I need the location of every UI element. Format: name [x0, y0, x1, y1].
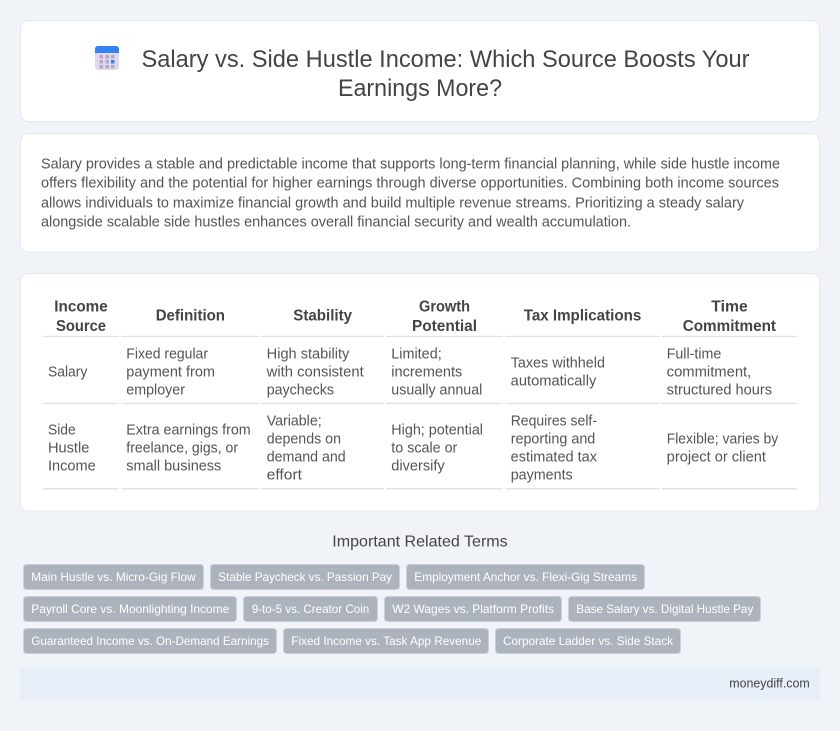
table header: Tax Implications [524, 308, 641, 325]
table row: side hustle income: Side [48, 422, 76, 438]
table row: salary: High stability [267, 346, 350, 362]
tag [406, 564, 644, 590]
panel: title card [20, 20, 820, 122]
icon: calendar [95, 46, 119, 70]
tag: Payroll Core vs. Moonlighting Income [31, 602, 230, 616]
tag: Corporate Ladder vs. Side Stack [503, 634, 674, 648]
table row: side hustle income: reporting and [511, 431, 595, 447]
table row: salary: structured hours [667, 382, 772, 398]
table row: side hustle income: estimated tax [511, 449, 598, 465]
tag [384, 596, 562, 622]
table row: side hustle income: demand and [267, 449, 346, 465]
tag [24, 564, 204, 590]
tag [244, 596, 378, 622]
table row: side hustle income: freelance, gigs, or [126, 440, 238, 456]
table row: salary: employer [126, 382, 185, 398]
table row: side hustle income: small business [126, 458, 221, 474]
tag [496, 628, 680, 654]
table row: salary: Full-time [667, 346, 721, 362]
tag [284, 628, 488, 654]
table row: salary: Fixed regular [126, 346, 208, 362]
table header: Income [54, 299, 108, 316]
table row: salary: Taxes withheld [511, 355, 605, 371]
table header: Growth [419, 299, 470, 316]
table rules [43, 336, 797, 489]
table row: side hustle income [48, 413, 779, 483]
title: Earnings More? [338, 75, 502, 102]
table row: salary: Salary [48, 364, 88, 380]
tag: W2 Wages vs. Platform Profits [392, 602, 554, 616]
panel: summary [20, 134, 820, 252]
tag: Base Salary vs. Digital Hustle Pay [576, 602, 753, 616]
heading: important related terms: Important Related Terms [332, 534, 508, 551]
title: Salary vs. Side Hustle Income: Which Source Boosts Your [142, 46, 750, 73]
summary text: alongside scalable side hustles enhances overall financial security and wealth accumulation. [41, 213, 631, 230]
footer [20, 667, 820, 701]
table row: salary: Limited; [391, 346, 442, 362]
table row: salary: with consistent [266, 364, 364, 380]
table row: side hustle income: project or client [667, 449, 766, 465]
table header: Time [711, 299, 748, 316]
table row: side hustle income: Income [48, 458, 96, 474]
tag: Employment Anchor vs. Flexi-Gig Streams [414, 570, 637, 584]
table row: salary: automatically [511, 373, 597, 389]
summary text: offers flexibility and the potential for higher earnings through diverse opportunities. Combining both income sources [41, 174, 779, 191]
tag: 9-to-5 vs. Creator Coin [252, 602, 369, 616]
table header [54, 299, 777, 335]
tag: Main Hustle vs. Micro-Gig Flow [31, 570, 196, 584]
table row: side hustle income: effort [267, 467, 302, 483]
summary text [41, 155, 780, 230]
tag [24, 628, 276, 654]
table row: side hustle income: Requires self- [511, 413, 597, 429]
table row: side hustle income: Extra earnings from [126, 422, 251, 438]
table row: side hustle income: Variable; [267, 413, 322, 429]
table header: Potential [412, 318, 477, 335]
summary text: Salary provides a stable and predictable income that supports long-term financial planning, while side hustle income [41, 155, 780, 172]
table header: Definition [156, 308, 225, 325]
tag [210, 564, 400, 590]
table row: salary: usually annual [391, 382, 482, 398]
table row: side hustle income: depends on [267, 431, 341, 447]
table row: salary: paychecks [267, 382, 334, 398]
table row: salary: payment from [126, 364, 215, 380]
table row: side hustle income: diversify [391, 458, 446, 474]
table row: side hustle income: payments [511, 467, 573, 483]
related term tags [24, 564, 760, 654]
tag: Guaranteed Income vs. On-Demand Earnings [31, 634, 269, 648]
table row: side hustle income: Hustle [48, 440, 89, 456]
tag: Fixed Income vs. Task App Revenue [291, 634, 482, 648]
footer: moneydiff.com [729, 676, 810, 691]
table header: Commitment [683, 318, 777, 335]
table row: side hustle income: to scale or [391, 440, 458, 456]
tag [24, 596, 236, 622]
table row: salary [48, 346, 772, 398]
table row: salary: commitment, [667, 364, 751, 380]
table row: side hustle income: High; potential [391, 422, 483, 438]
panel: comparison table [20, 274, 820, 511]
table row: salary: increments [391, 364, 462, 380]
summary text: allows individuals to maximize financial growth and build multiple revenue streams. Prioritizing a steady salary [41, 194, 744, 211]
title [142, 46, 750, 102]
table row: side hustle income: Flexible; varies by [667, 431, 779, 447]
table header: Source [56, 318, 106, 335]
tag [568, 596, 760, 622]
tag: Stable Paycheck vs. Passion Pay [218, 570, 392, 584]
table header: Stability [293, 308, 352, 325]
